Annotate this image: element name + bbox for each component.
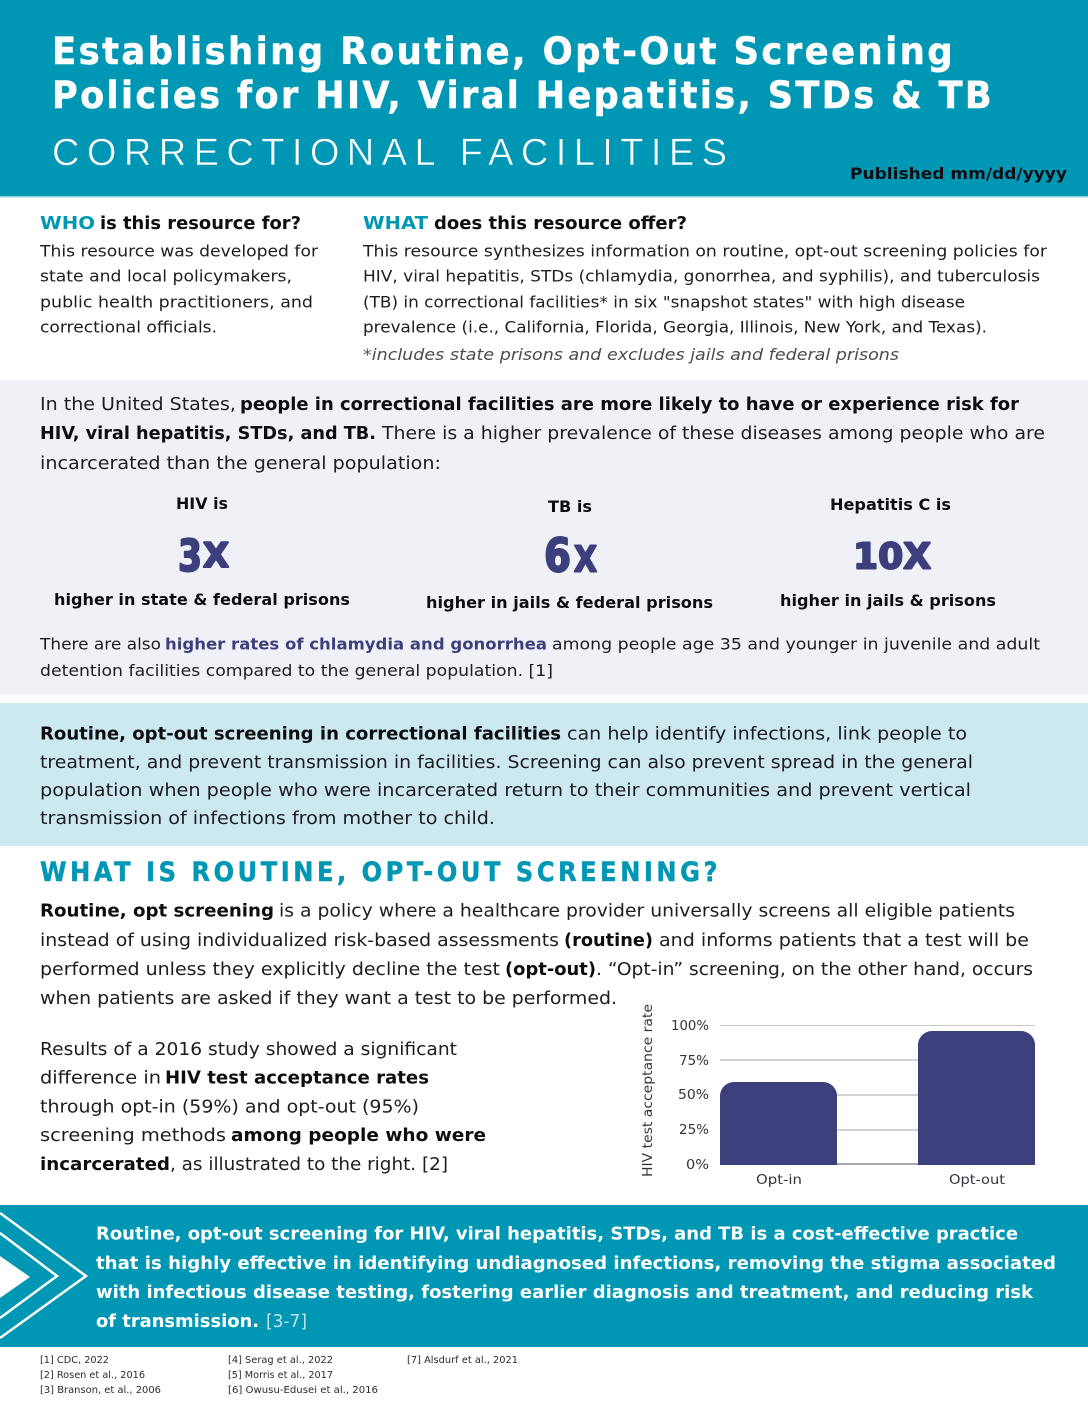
stat: HIV: higher in state & federal prisons — [54, 590, 350, 609]
stat: TB: higher in jails & federal prisons — [426, 593, 713, 612]
text: callout — [96, 1224, 1056, 1332]
text: definition: (routine) — [564, 931, 653, 951]
references: [4] Serag et al., 2022 — [228, 1355, 333, 1366]
title — [52, 30, 994, 117]
panel: prevalence — [0, 380, 1088, 695]
stat: HIV: HIV is — [176, 494, 228, 513]
stat: HIV: 3 — [178, 531, 202, 582]
text: who body: correctional officials. — [40, 318, 217, 336]
stat: TB: 6 — [544, 528, 571, 582]
category labels: Opt-out — [949, 1173, 1005, 1188]
heading: what: WHAT — [363, 214, 428, 234]
bar chart: HIV test acceptance rate — [641, 1004, 1035, 1188]
text: who body: This resource was developed for — [39, 242, 318, 260]
panel: who — [39, 214, 318, 336]
text: definition: is a policy where a healthcare provider universally screens all eligible patients — [279, 902, 1015, 922]
bar: opt-in — [720, 1082, 837, 1165]
text: prevalence intro: HIV, viral hepatitis, STDs, and TB. — [40, 424, 376, 444]
text: study results: , as illustrated to the right. [2] — [170, 1155, 448, 1175]
publication date: Published mm/dd/yyyy — [850, 164, 1068, 183]
heading: who: WHO — [40, 214, 95, 234]
references — [40, 1355, 518, 1396]
stat: Hepatitis C: 10X — [853, 536, 931, 578]
stat: TB — [426, 497, 713, 612]
axis tick labels: 75% — [679, 1054, 709, 1069]
text: chlamydia and gonorrhea: among people age 35 and younger in juvenile and adult — [552, 634, 1040, 654]
header banner — [0, 0, 1088, 198]
text: definition: performed unless they explicitly decline the test — [40, 960, 500, 980]
references: [2] Rosen et al., 2016 — [40, 1370, 145, 1381]
text: callout: with infectious disease testing, fostering earlier diagnosis and treatment, and reducing risk — [96, 1283, 1033, 1303]
text: callout: Routine, opt-out screening for HIV, viral hepatitis, STDs, and TB is a cost-effective practice — [96, 1224, 1018, 1244]
text: chlamydia and gonorrhea: detention facilities compared to the general population. [1] — [40, 661, 553, 680]
text: prevalence intro: In the United States, — [40, 395, 236, 415]
subtitle: CORRECTIONAL FACILITIES — [52, 132, 727, 174]
stat: TB: TB is — [548, 497, 592, 516]
text: prevalence intro: people in correctional facilities are more likely to have or experience risk for — [240, 395, 1019, 415]
panel: what — [362, 214, 1047, 364]
text: definition: instead of using individualized risk-based assessments — [40, 931, 559, 951]
category labels — [756, 1173, 1005, 1188]
panel: routine screening benefits: can help identify infections, link people to — [567, 724, 967, 744]
axis tick labels: 50% — [678, 1088, 709, 1103]
text: study results — [40, 1040, 486, 1175]
panel: routine screening benefits: population when people who were incarcerated return to their communities and prevent vertical — [40, 781, 971, 801]
text: who body: state and local policymakers, — [40, 266, 292, 286]
text: chlamydia and gonorrhea: higher rates of chlamydia and gonorrhea — [165, 634, 547, 654]
text: what body: prevalence (i.e., California, Florida, Georgia, Illinois, New York, and Texas). — [363, 318, 987, 336]
axis tick labels — [671, 1019, 709, 1173]
text: definition: and informs patients that a test will be — [659, 931, 1029, 951]
axis tick labels: 0% — [686, 1158, 709, 1173]
text: prevalence intro: incarcerated than the general population: — [40, 454, 441, 474]
references: [3] Branson, et al., 2006 — [40, 1385, 161, 1396]
text: who body: public health practitioners, and — [40, 292, 313, 312]
text: study results: screening methods — [40, 1126, 226, 1146]
text: prevalence intro — [40, 395, 1045, 474]
text: what body: (TB) in correctional facilities* in six "snapshot states" with high disease — [363, 292, 965, 312]
stat: TB: X — [574, 540, 597, 580]
axis title: HIV test acceptance rate — [641, 1004, 656, 1177]
text: what body — [362, 242, 1047, 336]
text: study results: among people who were — [231, 1126, 486, 1146]
heading: who: is this resource for? — [100, 214, 301, 234]
callout: cost-effective practice — [0, 1205, 1088, 1347]
title: Policies for HIV, Viral Hepatitis, STDs & TB — [52, 74, 994, 117]
text: who body — [39, 242, 318, 336]
text: study results: difference in — [40, 1068, 161, 1088]
text: prevalence intro: There is a higher prevalence of these diseases among people who are — [381, 424, 1045, 444]
bar: opt-out — [918, 1031, 1035, 1165]
title: Establishing Routine, Opt-Out Screening — [52, 30, 955, 73]
references: [5] Morris et al., 2017 — [228, 1370, 333, 1381]
references: [6] Owusu-Edusei et al., 2016 — [228, 1385, 378, 1396]
panel: routine screening benefits: transmission of infections from mother to child. — [40, 809, 495, 829]
text: definition: . “Opt-in” screening, on the other hand, occurs — [596, 960, 1033, 980]
axis tick labels: 100% — [671, 1019, 709, 1034]
stat: HIV — [54, 494, 350, 609]
text: definition: Routine, opt screening — [40, 902, 274, 922]
text: definition — [40, 902, 1033, 1009]
text: definition: (opt-out) — [505, 960, 596, 980]
text: study results: incarcerated — [40, 1155, 170, 1175]
category labels: Opt-in — [756, 1173, 802, 1188]
footnote: what: *includes state prisons and excludes jails and federal prisons — [363, 345, 899, 364]
stat: Hepatitis C: higher in jails & prisons — [780, 591, 996, 610]
text: what body: This resource synthesizes information on routine, opt-out screening policies for — [362, 242, 1047, 260]
panel: routine screening benefits: Routine, opt-out screening in correctional facilities — [40, 724, 561, 744]
text: study results: Results of a 2016 study showed a significant — [40, 1040, 457, 1060]
text: callout: [3-7] — [266, 1312, 307, 1332]
icon: chevron arrows — [0, 1213, 86, 1338]
stat: Hepatitis C — [780, 495, 996, 610]
heading: what is routine opt-out screening: WHAT IS ROUTINE, OPT-OUT SCREENING? — [40, 857, 721, 888]
text: study results: through opt-in (59%) and opt-out (95%) — [40, 1098, 419, 1118]
panel: routine screening benefits: treatment, and prevent transmission in facilities. Screening can also prevent spread in the general — [40, 753, 973, 773]
heading: what: does this resource offer? — [434, 214, 687, 234]
text: definition: when patients are asked if they want a test to be performed. — [40, 989, 617, 1009]
text: callout: that is highly effective in identifying undiagnosed infections, removing the stigma associated — [96, 1254, 1056, 1274]
stat: HIV: X — [203, 536, 229, 576]
panel: routine screening benefits — [0, 703, 1088, 846]
text: what body: HIV, viral hepatitis, STDs (chlamydia, gonorrhea, and syphilis), and tuberculosis — [363, 266, 1040, 286]
axis tick labels: 25% — [679, 1123, 709, 1138]
references: [7] Alsdurf et al., 2021 — [407, 1355, 518, 1366]
references: [1] CDC, 2022 — [40, 1355, 109, 1366]
text: study results: HIV test acceptance rates — [165, 1068, 429, 1088]
text: chlamydia and gonorrhea — [39, 634, 1040, 680]
text: callout: of transmission. — [96, 1312, 259, 1332]
stat: Hepatitis C: Hepatitis C is — [830, 495, 951, 514]
text: chlamydia and gonorrhea: There are also — [39, 634, 161, 654]
